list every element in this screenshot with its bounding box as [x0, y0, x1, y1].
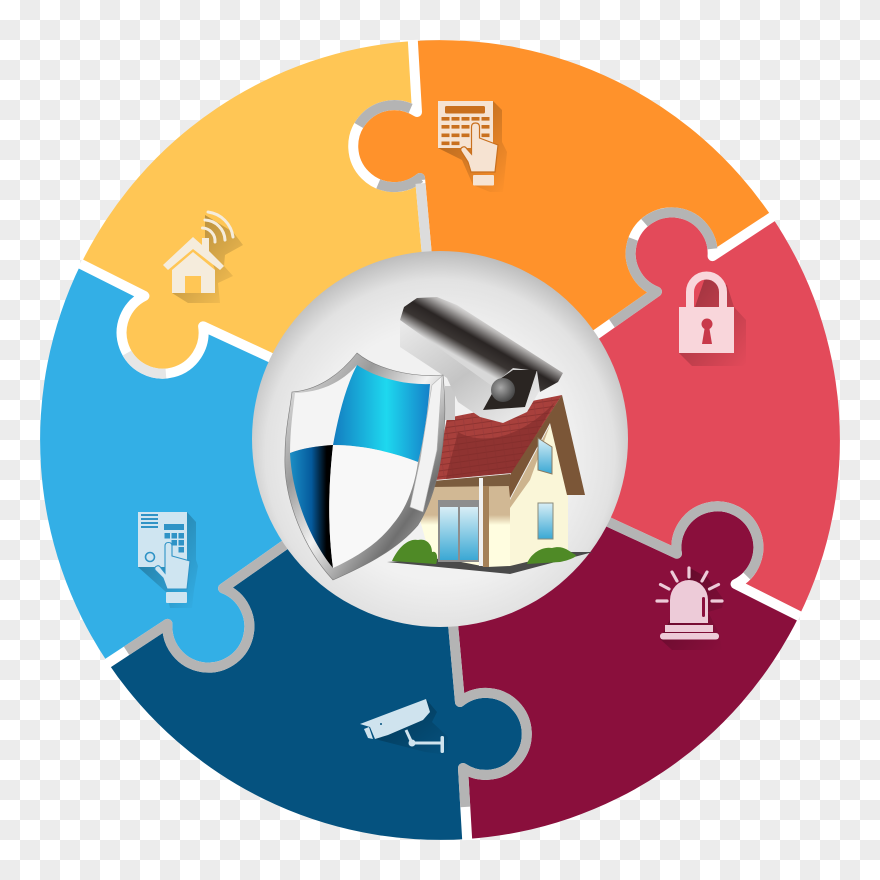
center disc: [252, 251, 628, 627]
panel: orange puzzle piece with keypad icon: [353, 40, 772, 440]
panel: blue puzzle piece with control panel icon: [0, 153, 483, 715]
icon: alarm control panel with pressing hand: [138, 512, 198, 608]
panel: red puzzle piece with padlock icon: [397, 165, 880, 727]
icon: calculator keypad with pressing hand: [438, 101, 507, 192]
ground shadow: [387, 552, 593, 574]
illustration: security camera: [400, 297, 563, 423]
panel: yellow puzzle piece with smart home icon: [50, 0, 606, 515]
panel: navy puzzle piece with CCTV icon: [108, 440, 527, 840]
icon: padlock: [679, 275, 746, 366]
illustration: shield: [285, 353, 445, 580]
icon: smart home with wifi waves: [163, 212, 243, 303]
icon: alarm siren: [657, 568, 724, 650]
illustration: house, camera and shield: [285, 297, 593, 580]
icon: CCTV camera: [360, 699, 448, 755]
panel: maroon puzzle piece with siren icon: [274, 365, 830, 880]
illustration: house: [392, 395, 585, 567]
